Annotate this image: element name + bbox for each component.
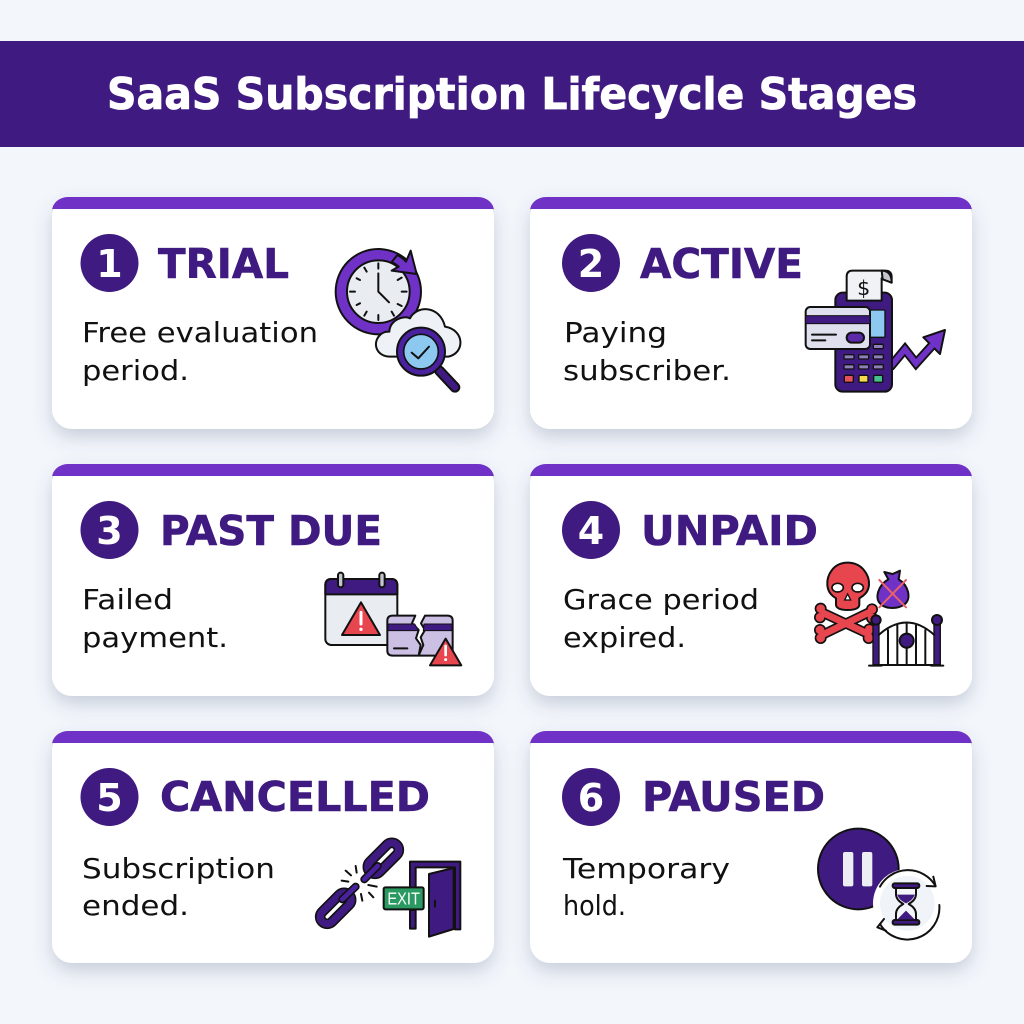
number badge 2: 2: [578, 242, 604, 286]
description: cancelled: ended.: [82, 889, 189, 922]
panel: 2 active: [530, 197, 972, 429]
description: cancelled: Subscription: [82, 852, 275, 885]
heading: past due: PAST DUE: [160, 507, 382, 555]
panel: 3 past due: [52, 464, 494, 696]
description: unpaid: [563, 583, 759, 654]
number badge 1: [80, 234, 138, 292]
description: past due: [82, 583, 228, 654]
icon: calendar, broken card and warnings: [325, 573, 461, 665]
number badge 3: [80, 501, 138, 559]
number badge 5: [80, 768, 138, 826]
description: unpaid: expired.: [563, 621, 686, 654]
number badge 6: [562, 768, 620, 826]
panel: 4 unpaid: [530, 464, 972, 696]
title banner: [0, 41, 1024, 147]
description: active: [563, 316, 731, 387]
number badge 3: 3: [96, 509, 123, 553]
number badge 4: 4: [578, 509, 604, 553]
panel: 1 trial: [52, 197, 494, 429]
icon: payment terminal, card and growth arrow: $: [857, 276, 870, 300]
description: unpaid: Grace period: [563, 583, 759, 616]
panel: 5 cancelled: [52, 731, 494, 963]
heading: unpaid: UNPAID: [641, 507, 818, 555]
heading: active: ACTIVE: [640, 240, 803, 288]
description: active: Paying: [564, 316, 667, 349]
number badge 6: 6: [578, 776, 604, 820]
description: paused: hold.: [563, 889, 626, 922]
number badge 5: 5: [96, 776, 123, 820]
icon: skull, crossbones, money bag and gate: [814, 563, 943, 666]
description: trial: [82, 316, 318, 387]
icon: broken chain and exit door: [317, 840, 460, 937]
description: trial: period.: [82, 354, 189, 387]
description: cancelled: [82, 852, 275, 922]
icon: pause button and hourglass: [818, 829, 942, 940]
number badge 1: 1: [96, 242, 123, 286]
number badge 4: [562, 501, 620, 559]
description: active: subscriber.: [563, 354, 731, 387]
heading: paused: PAUSED: [642, 773, 825, 821]
heading: cancelled: CANCELLED: [160, 773, 430, 821]
panel: 6 paused: [530, 731, 972, 963]
heading: trial: TRIAL: [158, 240, 289, 288]
icon: payment terminal, card and growth arrow: [806, 271, 945, 392]
number badge 2: [562, 234, 620, 292]
icon: broken chain and exit door: EXIT: [387, 889, 420, 909]
description: past due: payment.: [82, 621, 228, 654]
title: SaaS Subscription Lifecycle Stages: [107, 69, 917, 120]
icon: clock, cloud and magnifier: [336, 249, 460, 387]
description: paused: [562, 852, 730, 922]
description: paused: Temporary: [562, 852, 730, 885]
description: past due: Failed: [82, 583, 173, 616]
description: trial: Free evaluation: [82, 316, 318, 349]
